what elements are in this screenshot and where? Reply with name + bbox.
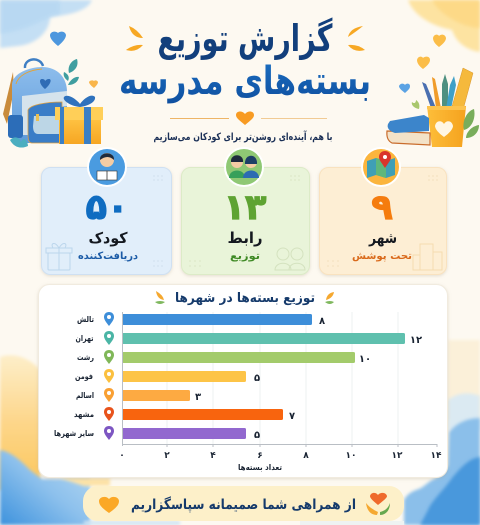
title: گزارش توزیع bbox=[158, 17, 333, 60]
icon: heading leaf right bbox=[325, 292, 334, 304]
icon: heading leaf left bbox=[155, 291, 165, 304]
row: Talesh: ۸ bbox=[319, 316, 325, 327]
footer pill bbox=[83, 486, 404, 521]
icon: heart left bbox=[99, 497, 119, 513]
panel: chart bbox=[38, 284, 448, 478]
row: Mashhad: مشهد bbox=[74, 410, 94, 419]
watermark: people bbox=[275, 248, 305, 270]
row: Rasht bbox=[77, 350, 371, 365]
panel: card children bbox=[42, 147, 172, 274]
title bbox=[119, 17, 371, 104]
icon: backpack bbox=[3, 59, 67, 148]
icon: child reading bbox=[87, 147, 127, 187]
label: children: کودک bbox=[88, 229, 128, 247]
row: Other cities: سایر شهرها bbox=[54, 429, 94, 438]
x axis: ۱۲ bbox=[392, 451, 403, 461]
label: city: شهر bbox=[368, 229, 397, 247]
title sparks left bbox=[126, 26, 143, 51]
row: Asalem: ۳ bbox=[195, 392, 201, 403]
dots bbox=[189, 175, 300, 267]
watercolor: bottom left bbox=[0, 355, 180, 525]
row: Mashhad: ۷ bbox=[289, 411, 295, 422]
row: Asalem bbox=[76, 388, 201, 403]
row: Mashhad bbox=[74, 407, 295, 422]
x axis: ۸ bbox=[303, 451, 309, 461]
watercolor: top left blue bbox=[0, 0, 92, 48]
row: Other cities bbox=[54, 426, 260, 441]
icon: two people bbox=[224, 147, 264, 187]
row: Asalem: اسالم bbox=[76, 391, 94, 400]
dots bbox=[153, 175, 163, 267]
label: liaison: رابط bbox=[228, 229, 262, 247]
x axis title: تعداد بسته‌ها bbox=[238, 463, 282, 472]
row: Rasht: رشت bbox=[77, 353, 94, 362]
row: Talesh bbox=[77, 312, 325, 327]
watercolor: bottom right bbox=[300, 340, 480, 525]
row: Fuman: فومن bbox=[75, 372, 93, 381]
bar chart bbox=[54, 312, 422, 441]
icon: map with pin bbox=[361, 147, 401, 187]
row: Tehran bbox=[76, 331, 422, 346]
row: Other cities: ۵ bbox=[254, 430, 260, 441]
icon: books bbox=[387, 115, 430, 145]
x axis: ۴ bbox=[210, 451, 216, 461]
row: Tehran: ۱۲ bbox=[410, 335, 422, 346]
icon: hearts right bbox=[399, 35, 446, 109]
sublabel: distribution: توزیع bbox=[230, 251, 260, 262]
row: Talesh: تالش bbox=[77, 315, 94, 325]
row: Tehran: تهران bbox=[76, 334, 94, 343]
value: 13: ۱۳ bbox=[224, 188, 266, 228]
x axis: ۱۰ bbox=[346, 451, 356, 461]
sublabel: recipients: دریافت‌کننده bbox=[78, 251, 138, 262]
row: Rasht: ۱۰ bbox=[359, 354, 371, 365]
watermark: city bbox=[413, 244, 442, 270]
x axis bbox=[119, 312, 442, 461]
sublabel: covered: تحت پوشش bbox=[352, 251, 412, 262]
title sparks right bbox=[348, 26, 365, 51]
title: بسته‌های مدرسه bbox=[119, 59, 371, 104]
watermark: gift bbox=[46, 243, 72, 270]
value: 50: ۵۰ bbox=[86, 188, 128, 228]
subtitle: با هم، آینده‌ای روشن‌تر برای کودکان می‌سازیم bbox=[154, 130, 332, 143]
row: Fuman bbox=[75, 369, 260, 384]
icon: pencil cup and ruler bbox=[422, 68, 479, 147]
x axis: ۶ bbox=[257, 451, 263, 461]
panel: card cities bbox=[320, 147, 446, 274]
watercolor: top right yellow bbox=[408, 0, 480, 52]
footer text: از همراهی شما صمیمانه سپاسگزاریم bbox=[131, 496, 356, 513]
icon: hands with heart bbox=[366, 493, 390, 515]
panel: card liaisons bbox=[182, 147, 310, 274]
dots bbox=[327, 175, 438, 267]
chart heading: توزیع بسته‌ها در شهرها bbox=[175, 291, 315, 306]
x axis: ۱۴ bbox=[430, 451, 442, 461]
icon: leaves and small hearts left bbox=[50, 32, 98, 88]
x axis: ۲ bbox=[164, 451, 170, 461]
row: Fuman: ۵ bbox=[254, 373, 260, 384]
divider with heart bbox=[170, 111, 327, 125]
icon: gift box bbox=[55, 96, 103, 144]
x axis: ۰ bbox=[119, 451, 125, 461]
value: 9: ۹ bbox=[371, 188, 393, 228]
